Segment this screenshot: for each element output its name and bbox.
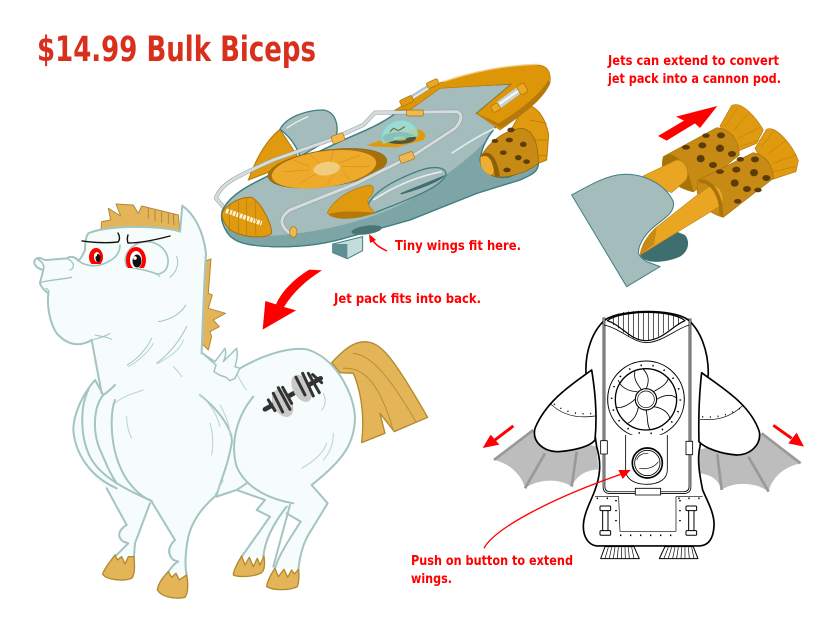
- peg: [333, 237, 363, 259]
- front fin: [755, 129, 798, 179]
- mane back: [202, 259, 226, 350]
- far side fin: [248, 129, 300, 180]
- shield: [572, 174, 674, 287]
- button: [632, 448, 662, 478]
- note: tiny wings: [369, 234, 521, 254]
- jet nozzle: [480, 128, 538, 177]
- button housing: [626, 435, 667, 484]
- mane top: [100, 204, 180, 240]
- exhaust nozzles: [601, 547, 698, 559]
- front fan: [265, 142, 389, 195]
- orange side cap: [327, 185, 375, 218]
- jet pack illustration: [216, 64, 550, 259]
- body outlines: [73, 349, 355, 575]
- hooves: [103, 555, 299, 598]
- front barrel: [640, 185, 723, 255]
- top pipes: [399, 78, 528, 113]
- left extended wing: [494, 430, 598, 488]
- bottom cylinders: [600, 506, 697, 535]
- shadow: [640, 232, 688, 262]
- pipe collars: [290, 110, 423, 237]
- lower body shade: [225, 125, 538, 247]
- fur lines: [115, 340, 333, 495]
- fan: [608, 361, 684, 438]
- clips: [601, 441, 607, 454]
- body fill: [73, 340, 355, 575]
- body details: [73, 340, 355, 598]
- note: jets extend: Jets can extend to convert: [607, 54, 779, 69]
- pony: [34, 204, 428, 598]
- front cannon sleeve: [697, 153, 773, 217]
- nose vent: [222, 197, 272, 237]
- top orange panel: [395, 65, 550, 130]
- rear fin: [720, 105, 763, 152]
- eyes: [89, 247, 146, 268]
- left stub wing: [534, 370, 596, 452]
- small arrow: [371, 238, 387, 251]
- right extended wing: [697, 433, 801, 492]
- wing plan diagram: [483, 311, 804, 559]
- left red arrow: [495, 426, 513, 440]
- pipes: [216, 112, 461, 233]
- cockpit strip and dome: [367, 129, 425, 147]
- body: [583, 312, 714, 546]
- note: jets extend: [607, 54, 781, 87]
- tail: [332, 342, 428, 443]
- right red arrow: [773, 425, 792, 438]
- note: jets extend: jet pack into a cannon pod.: [607, 72, 781, 87]
- side fairing: [367, 168, 446, 213]
- note: push button: [411, 554, 573, 587]
- rear cannon sleeve: [662, 128, 739, 192]
- lower panel: [595, 497, 703, 531]
- cannon pod illustration: [572, 105, 798, 287]
- note: push button: wings.: [411, 572, 452, 587]
- title: $14.99 Bulk Biceps: [37, 30, 316, 70]
- head outline: [34, 206, 206, 393]
- right stub wing: [699, 373, 760, 455]
- rails: [604, 317, 690, 493]
- big curved arrow: [263, 270, 322, 330]
- rear barrel: [643, 160, 688, 193]
- rear fin: [510, 105, 549, 167]
- angry brows: [82, 233, 170, 243]
- top vent: [607, 312, 685, 341]
- note: tiny wings: Tiny wings fit here.: [395, 239, 521, 254]
- red arrow: [658, 106, 717, 141]
- head fill: [34, 206, 206, 393]
- wing: [202, 348, 240, 381]
- nozzle dots: [492, 128, 530, 172]
- pointer line: [484, 474, 622, 548]
- note: jet pack fits: Jet pack fits into back.: [333, 292, 481, 307]
- note: push button: Push on button to extend: [411, 554, 573, 569]
- cutie mark dumbbell: [265, 371, 322, 421]
- wing slot: [351, 224, 382, 236]
- body: [222, 84, 538, 247]
- centre panel: [604, 325, 689, 343]
